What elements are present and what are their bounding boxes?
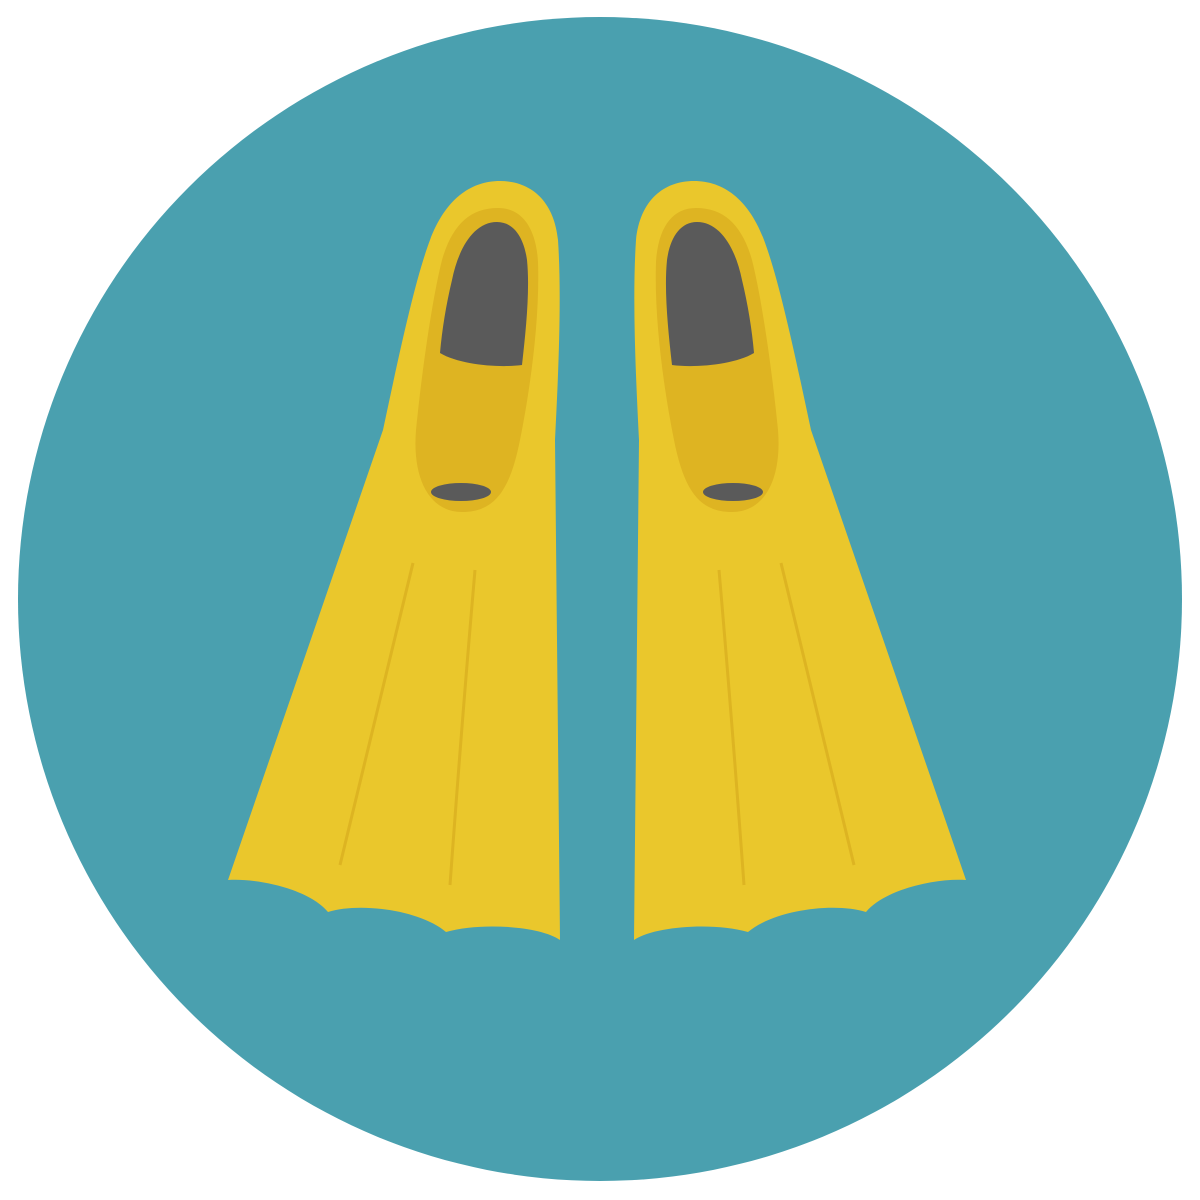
blade ribs bbox=[340, 563, 413, 865]
left fin bbox=[228, 181, 560, 940]
right fin bbox=[634, 181, 966, 940]
toe opening bbox=[440, 222, 528, 366]
fin blade bbox=[228, 181, 560, 940]
foot pocket bbox=[415, 208, 538, 512]
heel slot bbox=[431, 483, 491, 501]
